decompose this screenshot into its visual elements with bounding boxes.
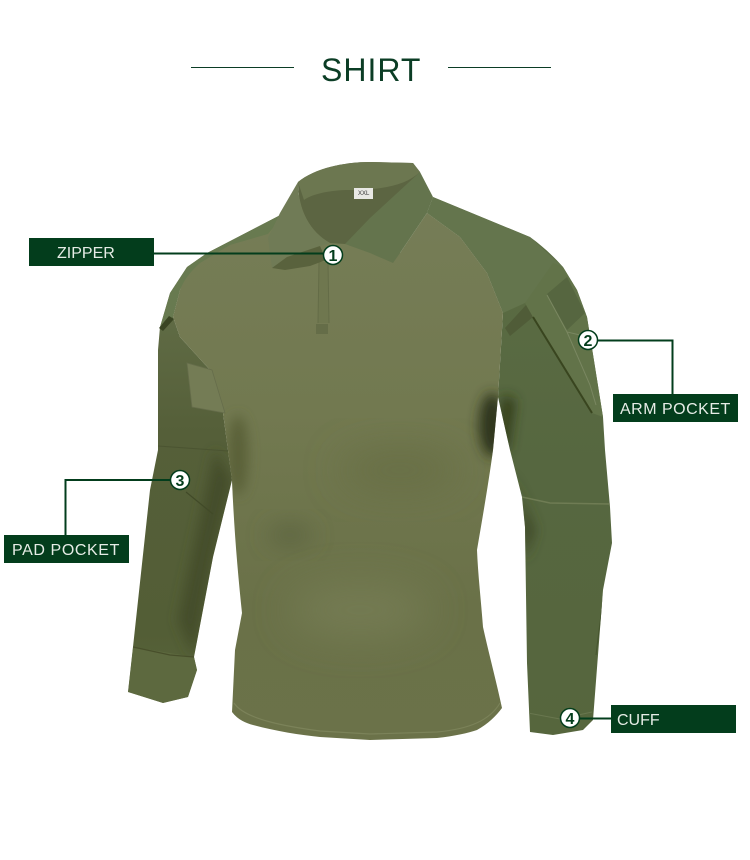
collar [268, 162, 433, 270]
right sleeve [425, 190, 620, 740]
callout: cuff: 4 [566, 711, 575, 728]
shirt illustration [120, 162, 620, 745]
callout: zipper [29, 238, 342, 266]
callout: arm pocket: ARM POCKET [620, 401, 731, 418]
zipper placket [316, 262, 329, 334]
collar back interior [298, 162, 420, 245]
title: SHIRT [321, 52, 421, 88]
infographic: shirt features [4, 58, 738, 740]
right collar flap [345, 172, 433, 263]
left chest pocket [187, 363, 225, 413]
callout: arm pocket [578, 330, 738, 422]
left sleeve [128, 216, 279, 703]
callout: pad pocket: 3 [176, 473, 185, 490]
size label [354, 188, 373, 199]
velcro patch [547, 277, 585, 330]
callout: zipper: 1 [329, 248, 338, 265]
callout: cuff [560, 705, 736, 733]
collar: XXL [358, 191, 370, 197]
callout: pad pocket [4, 470, 190, 563]
left collar flap [268, 182, 330, 268]
callout: arm pocket: 2 [584, 333, 593, 350]
torso [170, 190, 510, 745]
callout: pad pocket: PAD POCKET [12, 542, 120, 559]
arm pocket flap [525, 263, 603, 417]
left sleeve tab [159, 316, 174, 331]
callout: cuff: CUFF [617, 712, 660, 729]
callout: zipper: ZIPPER [57, 245, 115, 262]
